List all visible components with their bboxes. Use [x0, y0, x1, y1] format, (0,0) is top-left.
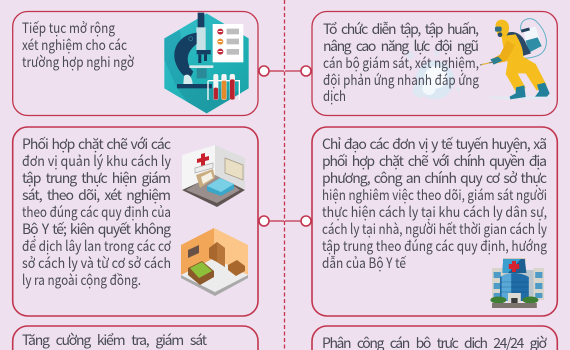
text: direct district health units: Chỉ đạo các đơn vị y tế tuyến huyện, xã [322, 134, 547, 154]
text: expand testing [22, 18, 134, 72]
text: quarantine coordination: Bộ Y tế; kiên quyết không [22, 219, 171, 239]
text: direct district health units [322, 134, 548, 273]
icon: orange isolation room [181, 228, 248, 296]
text: quarantine coordination: sở cách ly và từ cơ sở cách [22, 253, 171, 273]
text: drills and training: đội phản ứng nhanh đáp ứng [323, 70, 479, 90]
text: quarantine coordination: sát, theo dõi, xét nghiệm [22, 185, 171, 205]
text: drills and training [323, 19, 479, 106]
text: direct district health units: thực hiện cách ly tại khu cách ly dân sự, [322, 202, 547, 222]
text: expand testing: trường hợp nghi ngờ [22, 52, 134, 72]
text: quarantine coordination [22, 134, 172, 290]
text: quarantine coordination: Phối hợp chặt chẽ với các [22, 134, 171, 154]
text: drills and training: cán bộ giám sát, xét nghiệm, [323, 53, 479, 73]
center dashed timeline [284, 0, 286, 350]
text: quarantine coordination: tập trung thực hiện giám [22, 168, 171, 188]
text: quarantine coordination: theo đúng các quy định của [22, 202, 171, 222]
icon: hazmat sprayer [480, 19, 553, 99]
icon: disinfectant mist [406, 51, 460, 99]
text: direct district health units: dẫn của Bộ Y tế [322, 253, 406, 273]
text: direct district health units: phối hợp chặt chẽ với chính quyền địa [322, 151, 547, 171]
icon: white isolation room [182, 145, 245, 207]
text: quarantine coordination: đơn vị quản lý khu cách ly [22, 151, 172, 171]
text: quarantine coordination: để dịch lây lan trong các cơ [22, 236, 171, 256]
text: drills and training: Tổ chức diễn tập, tập huấn, [323, 19, 479, 39]
text: quarantine coordination: ly ra ngoài cộng đồng. [22, 270, 141, 290]
text: direct district health units: phương, công an chính quy cơ sở thực [322, 168, 547, 188]
connector: panel 1 left [259, 66, 284, 76]
panel: expand testing [13, 12, 258, 116]
text: expand testing: xét nghiệm cho các [22, 35, 127, 55]
panel: direct district health units [312, 127, 557, 316]
panel: on-duty staffing [312, 326, 557, 350]
panel: strengthen inspection [13, 326, 258, 350]
text: drills and training: dịch [323, 86, 346, 106]
icon: hospital building [490, 258, 544, 308]
text: drills and training: nâng cao năng lực đội ngũ [323, 36, 479, 56]
connector: panel 2 left [259, 216, 284, 226]
connector: panel 2 right [285, 216, 311, 226]
text: expand testing: Tiếp tục mở rộng [22, 18, 115, 38]
panel: quarantine coordination [13, 127, 258, 316]
panel: drills and training [312, 12, 557, 116]
icon: microscope hexagon [164, 13, 249, 113]
text: strengthen inspection: Tăng cường kiểm tra, giám sát [22, 330, 208, 350]
connector: panel 1 right [285, 66, 311, 76]
